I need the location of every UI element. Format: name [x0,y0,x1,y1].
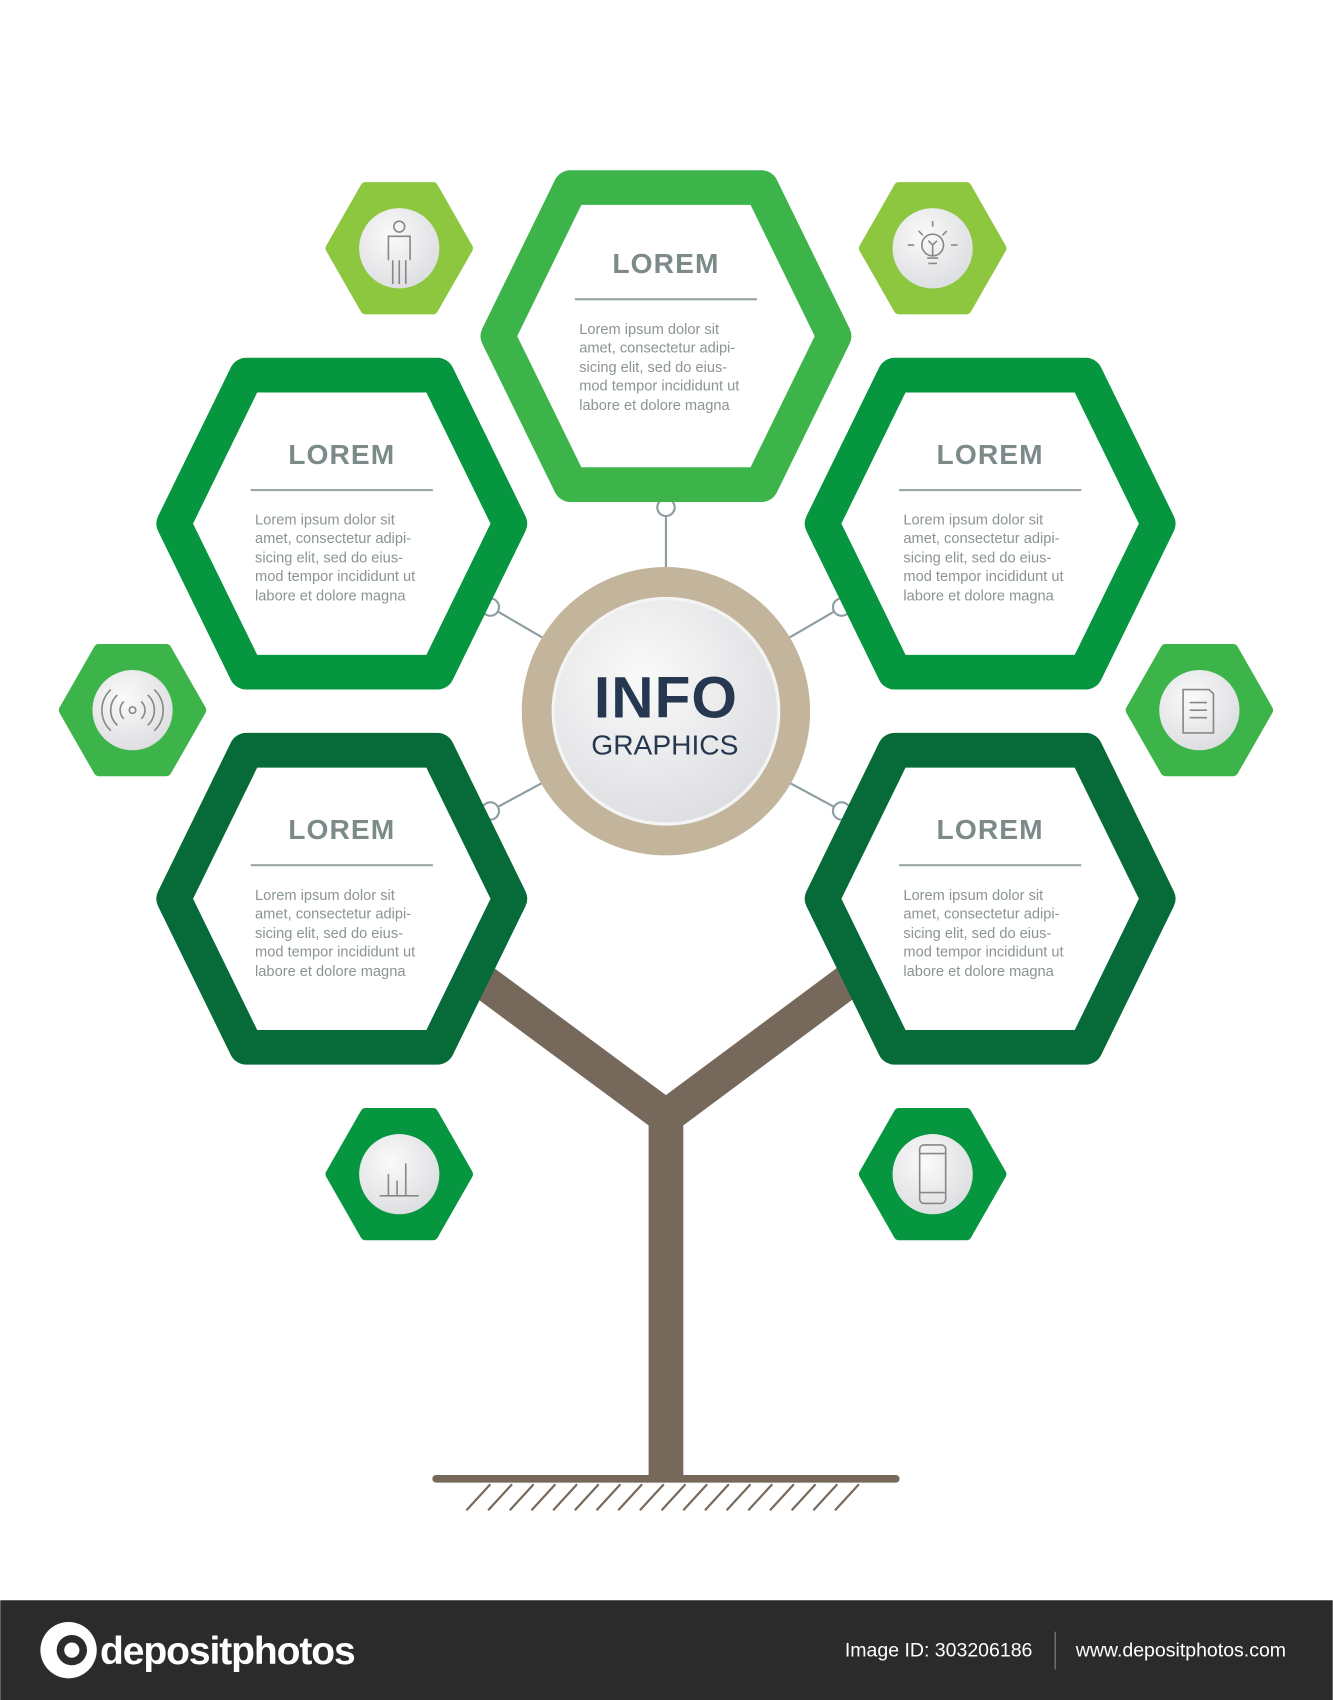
footer bar [0,1600,1333,1700]
hexagon: lower right: labore et dolore magna [903,964,1055,980]
hexagon: top: Lorem ipsum dolor sit [579,322,719,338]
footer bar: www.depositphotos.com [1075,1640,1286,1662]
connectors [482,499,850,820]
hexagon: upper right: LOREM [937,438,1044,470]
hexagon: lower right: sicing elit, sed do eius- [903,926,1051,942]
hexagon: lower left: sicing elit, sed do eius- [255,926,403,942]
hexagon: top: mod tempor incididunt ut [579,378,739,394]
hexagon: upper left: sicing elit, sed do eius- [255,551,403,567]
hexagon: upper left: amet, consectetur adipi- [255,531,411,547]
hexagon: top: amet, consectetur adipi- [579,340,735,356]
hexagon: upper right: labore et dolore magna [903,589,1055,605]
hexagon: top: sicing elit, sed do eius- [579,360,727,376]
hexagon: upper left: LOREM [288,438,395,470]
icon hex: bulb [864,188,1001,309]
hexagon: upper right: amet, consectetur adipi- [903,531,1060,547]
hexagon: top [498,188,834,485]
icon hex: document [1131,649,1268,771]
icon hex: chart [331,1113,468,1235]
icon hex: person [331,188,468,309]
tree trunk and branches [483,981,848,1479]
hexagon: lower left [174,750,510,1047]
icon hex: phone [864,1113,1001,1235]
hexagon: upper left: mod tempor incididunt ut [255,569,415,585]
hexagon: lower right: mod tempor incididunt ut [903,944,1064,960]
footer bar: depositphotos [100,1630,355,1673]
hexagon: lower left: labore et dolore magna [255,964,406,980]
hexagon: upper left: labore et dolore magna [255,589,406,605]
hexagon: lower right [822,750,1158,1047]
hexagon: top: LOREM [612,247,720,279]
hexagon: lower left: LOREM [288,813,395,845]
hexagon: upper left: Lorem ipsum dolor sit [255,513,395,529]
center circle: INFO [594,666,738,731]
hexagon: top: labore et dolore magna [579,398,731,414]
icon hex: signal [64,649,201,771]
hexagon: upper right: mod tempor incididunt ut [903,569,1064,585]
hexagon: lower left: Lorem ipsum dolor sit [255,888,395,904]
hexagon: upper right: sicing elit, sed do eius- [903,551,1051,567]
hexagon: lower left: amet, consectetur adipi- [255,906,411,922]
hexagon: upper right [822,375,1158,672]
hexagon: lower right: LOREM [937,813,1044,845]
hexagon: upper left [174,375,510,672]
hexagon: upper right: Lorem ipsum dolor sit [903,513,1043,529]
hexagon: lower left: mod tempor incididunt ut [255,944,415,960]
ground [436,1479,896,1510]
hexagon: lower right: Lorem ipsum dolor sit [903,888,1043,904]
hexagon: lower right: amet, consectetur adipi- [903,906,1060,922]
center circle [522,567,810,855]
center circle: GRAPHICS [591,729,738,761]
footer bar: Image ID: 303206186 [845,1640,1032,1662]
